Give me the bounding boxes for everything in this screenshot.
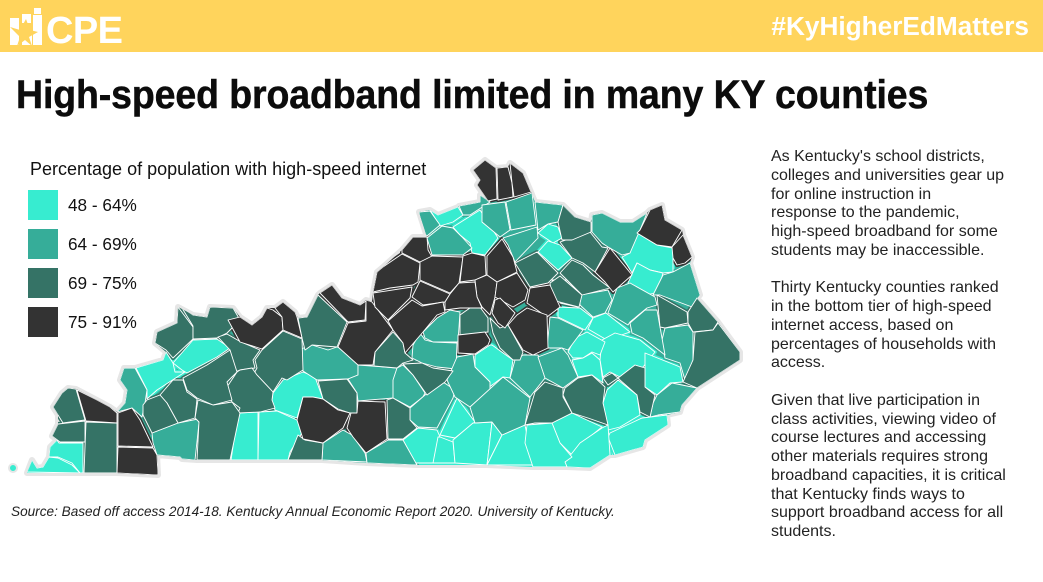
article text: access. (771, 354, 825, 371)
legend item 64-69: 64 - 69% (68, 234, 137, 254)
article text: class activities, viewing video of (771, 410, 996, 428)
article text: that Kentucky finds ways to (771, 486, 965, 502)
hashtag: #KyHigherEdMatters (771, 11, 1029, 41)
article text: As Kentucky's school districts, (771, 148, 985, 165)
article text: for online instruction in (771, 186, 931, 202)
legend item 48-64 (28, 190, 137, 220)
logo text: CPE (46, 10, 122, 52)
counties 69-75% (52, 205, 740, 473)
legend item 69-75 (28, 268, 137, 298)
Kentucky county map (8, 157, 743, 478)
legend item 69-75: 69 - 75% (68, 273, 137, 293)
article text: students. (771, 523, 836, 540)
article text: internet access, based on (771, 317, 953, 334)
legend item 75-91 (28, 307, 137, 337)
header band (0, 0, 1043, 52)
article text: students may be inaccessible. (771, 242, 984, 259)
article text: other materials requires strong (771, 448, 988, 465)
article text: support broadband access for all (771, 504, 1003, 521)
article text (771, 148, 1006, 540)
legend (28, 159, 426, 337)
icon: CPE logo mark (10, 8, 42, 45)
article text: colleges and universities gear up (771, 167, 1004, 184)
title: High-speed broadband limited in many KY counties (16, 73, 928, 117)
legend item 48-64: 48 - 64% (68, 195, 137, 215)
article text: response to the pandemic, (771, 204, 960, 221)
legend item 64-69 (28, 229, 137, 259)
article text: course lectures and accessing (771, 429, 986, 446)
article text: broadband capacities, it is critical (771, 467, 1006, 484)
counties 64-69% (117, 193, 700, 465)
article text: Given that live participation in (771, 392, 980, 409)
source note: Source: Based off access 2014-18. Kentucky Annual Economic Report 2020. University of Kentucky. (11, 504, 615, 519)
article text: Thirty Kentucky counties ranked (771, 279, 999, 296)
article text: high-speed broadband for some (771, 223, 998, 240)
counties 48-64% (27, 207, 683, 473)
article text: in the bottom tier of high-speed (771, 298, 992, 315)
legend item 75-91: 75 - 91% (68, 312, 137, 332)
legend heading: Percentage of population with high-speed internet (30, 159, 426, 179)
article text: percentages of households with (771, 336, 996, 352)
counties 75-91% (77, 160, 692, 475)
